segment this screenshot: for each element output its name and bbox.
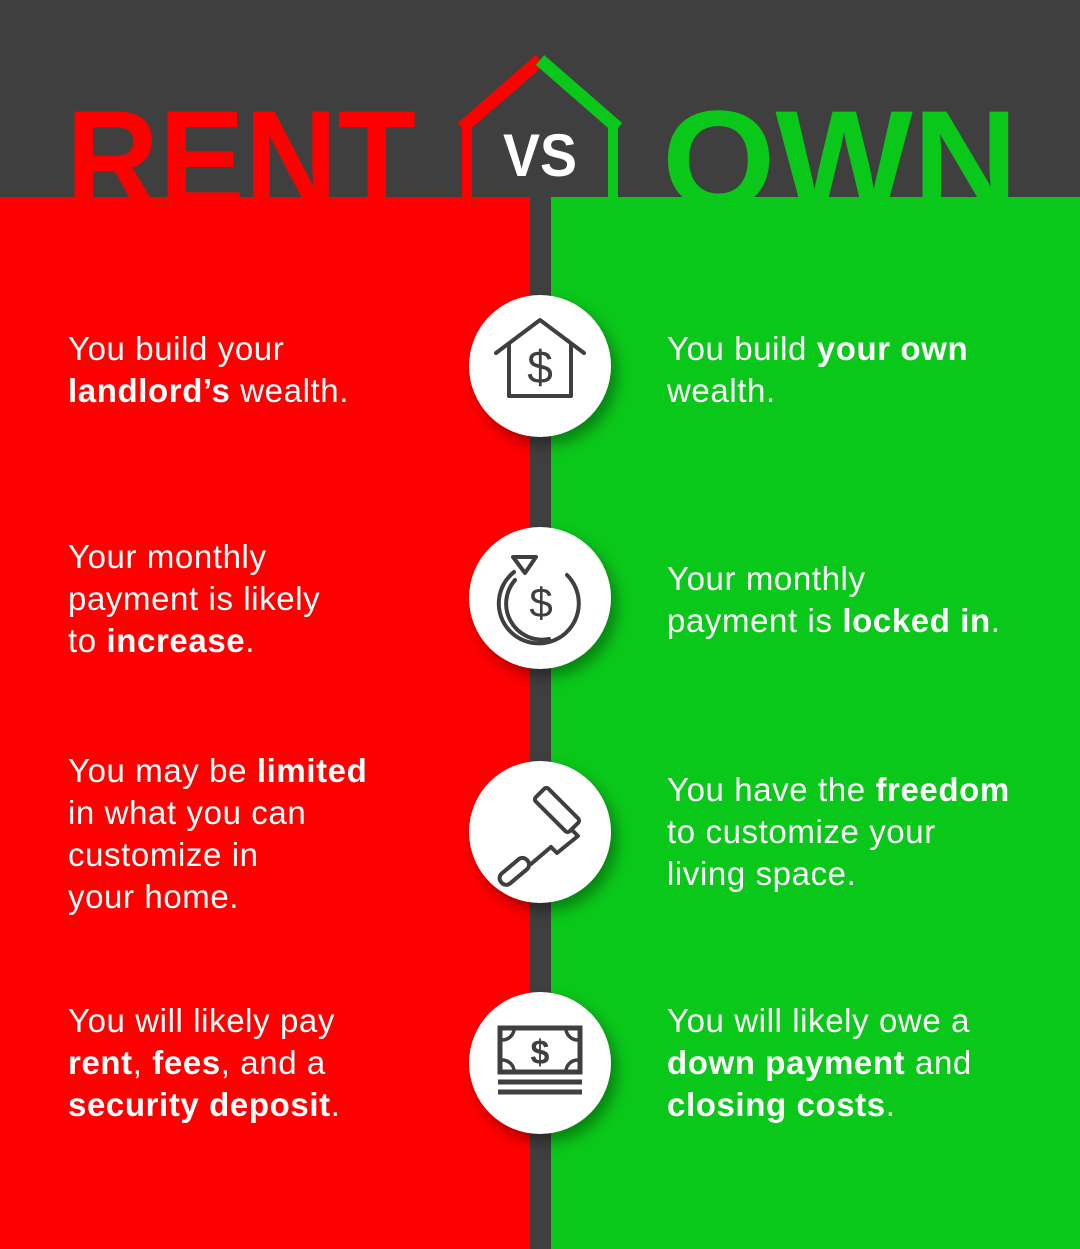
text: own 3 (667, 771, 1010, 892)
text: rent 3: customize in (68, 836, 259, 873)
text: rent 4: rent, fees, and a (68, 1044, 326, 1081)
text: own 3: to customize your (667, 813, 936, 850)
text: rent 4: You will likely pay (68, 1002, 335, 1039)
panel: rent (0, 197, 530, 1249)
icon: paint roller (469, 761, 611, 903)
text: rent 2: payment is likely (68, 580, 320, 617)
text: own 1: You build your own (667, 330, 968, 367)
icon: money: $ (531, 1034, 550, 1072)
text: own 3: You have the freedom (667, 771, 1010, 808)
text: own 3: living space. (667, 855, 856, 892)
text: own 1 (667, 330, 968, 409)
text: own 2: Your monthly (667, 560, 866, 597)
text: own 4: down payment and (667, 1044, 972, 1081)
text: rent 2 (68, 538, 320, 659)
title: vs: VS (503, 122, 577, 189)
text: rent 4 (68, 1002, 340, 1123)
text: rent 2: Your monthly (68, 538, 267, 575)
icon: cycle dollar (469, 527, 611, 669)
icon: house outline (462, 60, 618, 200)
text: own 1: wealth. (667, 372, 776, 409)
text: own 2 (667, 560, 1001, 639)
text: rent 3: in what you can (68, 794, 306, 831)
text: own 4: You will likely owe a (667, 1002, 970, 1039)
text: rent 3 (68, 752, 367, 915)
text: own 2: payment is locked in. (667, 602, 1001, 639)
icon: house dollar (469, 295, 611, 437)
text: rent 3: You may be limited (68, 752, 367, 789)
text: rent 1 (68, 330, 349, 409)
text: rent 2: to increase. (68, 622, 255, 659)
text: own 4: closing costs. (667, 1086, 895, 1123)
panel: own (551, 197, 1080, 1249)
icon: money (469, 992, 611, 1134)
text: rent 3: your home. (68, 878, 239, 915)
icon: house dollar: $ (527, 341, 553, 393)
text: rent 1: You build your (68, 330, 284, 367)
text: rent 1: landlord’s wealth. (68, 372, 349, 409)
text: rent 4: security deposit. (68, 1086, 340, 1123)
text: own 4 (667, 1002, 972, 1123)
title (66, 55, 1018, 197)
icon: cycle dollar: $ (529, 579, 553, 626)
